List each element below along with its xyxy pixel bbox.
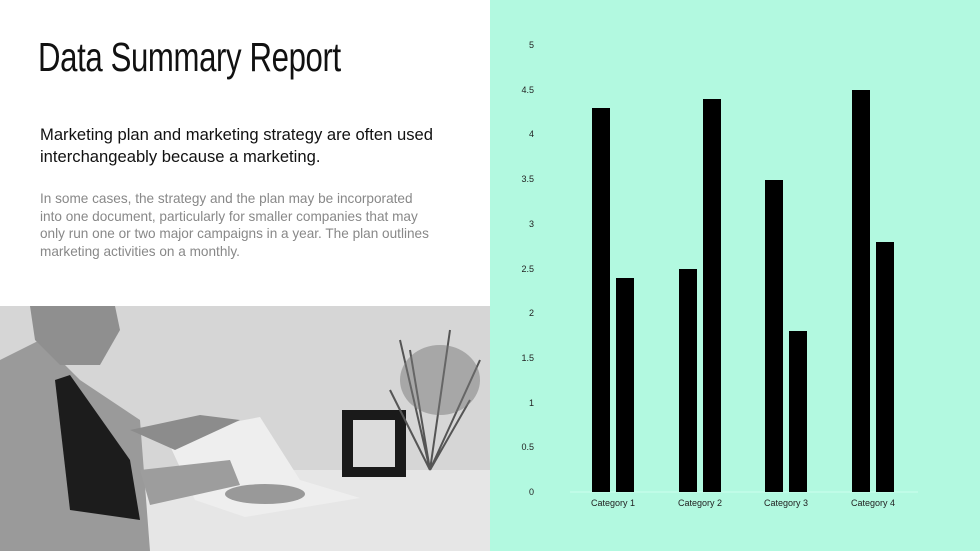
y axis labels: 3.5 — [521, 174, 534, 184]
photo: man reading — [0, 306, 490, 551]
y axis labels: 1 — [529, 398, 534, 408]
y axis labels: 5 — [529, 40, 534, 50]
category labels: Category 1 — [591, 498, 635, 508]
title: Data Summary Report — [38, 34, 341, 80]
chart panel — [490, 0, 980, 551]
category labels — [591, 498, 895, 508]
y axis labels: 4 — [529, 129, 534, 139]
y axis labels: 2 — [529, 308, 534, 318]
y axis labels: 1.5 — [521, 353, 534, 363]
bars — [592, 90, 894, 492]
subheading: Marketing plan and marketing strategy are often used interchangeably because a marketing. — [40, 125, 433, 166]
y axis labels: 0.5 — [521, 442, 534, 452]
y axis labels: 3 — [529, 219, 534, 229]
category labels: Category 2 — [678, 498, 722, 508]
bar chart — [521, 40, 918, 508]
category labels: Category 4 — [851, 498, 895, 508]
body text: In some cases, the strategy and the plan may be incorporated into one document, particularly for smaller companies that may only run one or two major campaigns in a year. The plan outlines marketing activities on a monthly. — [40, 191, 429, 258]
y axis labels: 0 — [529, 487, 534, 497]
y axis labels: 2.5 — [521, 264, 534, 274]
y axis labels: 4.5 — [521, 85, 534, 95]
category labels: Category 3 — [764, 498, 808, 508]
y axis labels — [521, 40, 534, 497]
